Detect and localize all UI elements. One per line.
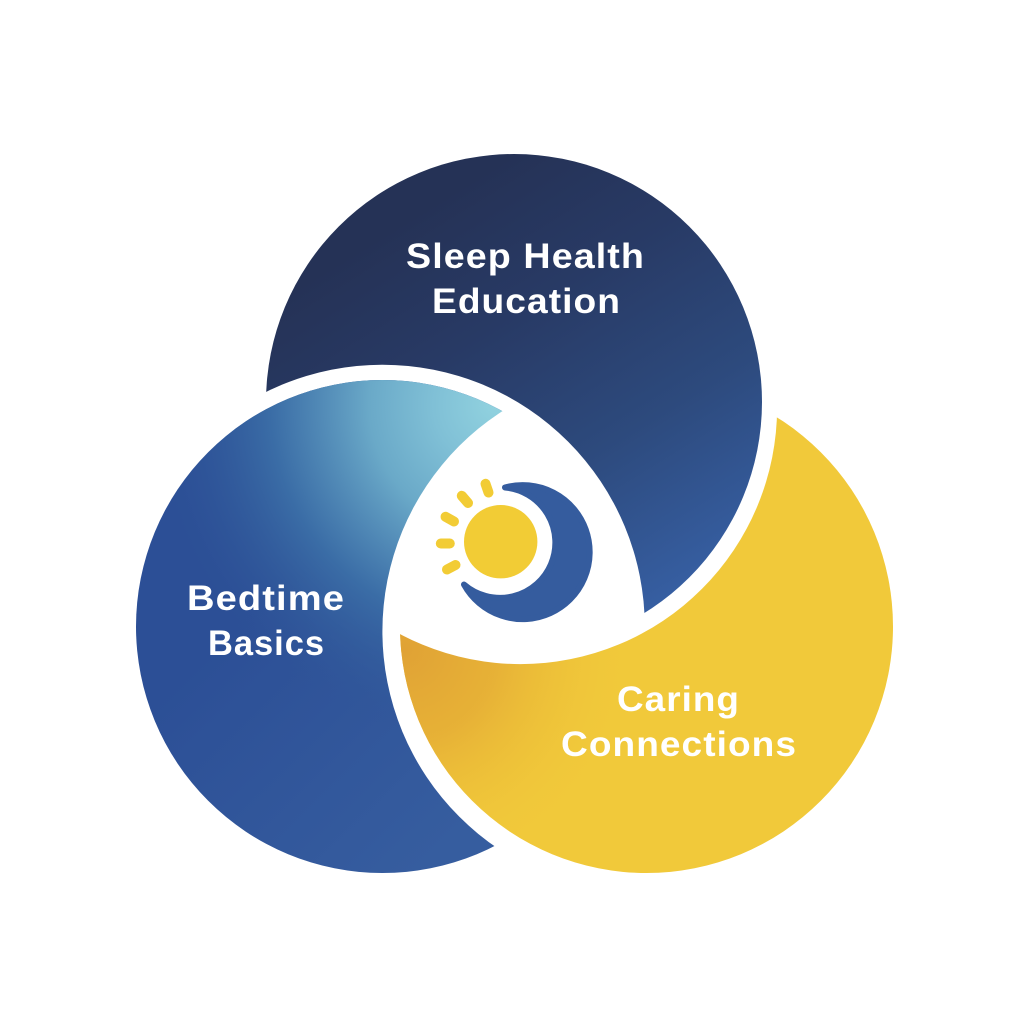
label: Caring Connections — [561, 680, 797, 764]
panel: Caring Connections — [400, 380, 893, 873]
label: Caring Connections: Connections — [561, 725, 797, 764]
label: Sleep Health Education — [406, 237, 645, 321]
icon: crescent moon — [464, 485, 590, 619]
icon: sun and moon — [441, 484, 590, 619]
label: Caring Connections: Caring — [617, 680, 740, 719]
label: Bedtime Basics: Bedtime — [187, 579, 345, 618]
label: Bedtime Basics — [187, 579, 345, 663]
icon: sun — [441, 484, 537, 578]
panel: Bedtime Basics — [136, 380, 502, 873]
label: Sleep Health Education: Education — [432, 282, 621, 321]
label: Bedtime Basics: Basics — [208, 624, 325, 663]
label: Sleep Health Education: Sleep Health — [406, 237, 645, 276]
panel: Sleep Health Education — [266, 154, 762, 650]
venn diagram — [136, 154, 893, 873]
